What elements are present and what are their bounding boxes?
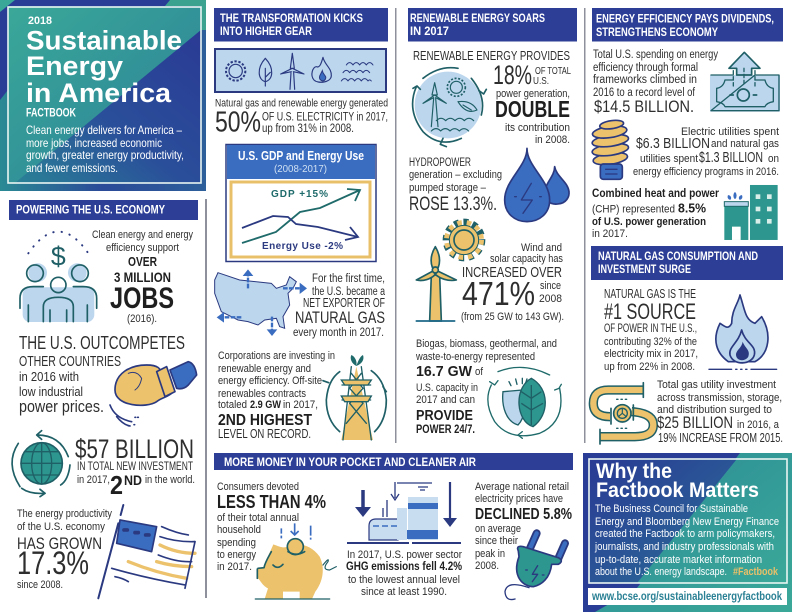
text: 14.5 billion xyxy=(593,49,718,116)
text: 14.5 billion: frameworks climbed in xyxy=(593,74,697,86)
text: 50 percent of electricity: 50% xyxy=(215,106,261,138)
text: electricity prices: peak in xyxy=(475,548,505,560)
icon: buildings xyxy=(724,185,778,240)
text: outcompetes: THE U.S. OUTCOMPETES xyxy=(19,333,185,353)
icon: sun and wind turbine xyxy=(416,223,481,321)
heading: IN 2017 xyxy=(410,24,449,38)
text: utilities: $1.3 BILLION xyxy=(699,150,763,166)
text: biogas, biomass, geothermal: of xyxy=(475,366,484,378)
text: wind and solar: (from 25 GW to 143 GW). xyxy=(461,311,564,323)
icon: globe xyxy=(12,431,70,497)
text: electricity prices: DECLINED 5.8% xyxy=(475,506,572,523)
text: explanation: about the U.S. energy landscape. xyxy=(595,566,727,578)
icon: people and dollar xyxy=(20,232,97,322)
text: investment: IN TOTAL NEW INVESTMENT xyxy=(77,461,193,473)
text: 14.5 billion: Total U.S. spending on energy xyxy=(593,49,718,61)
icon: power plant with falling emissions xyxy=(347,482,461,543)
text: biogas, biomass, geothermal: 16.7 GW xyxy=(416,363,473,380)
text: 18 percent double: U.S. xyxy=(533,75,549,87)
text: less than 4 percent: spending xyxy=(217,537,256,549)
text: gas utility investment: $25 BILLION xyxy=(657,413,733,432)
intro text: Clean energy delivers for America – xyxy=(26,123,182,137)
text: combined heat and power: of U.S. power generation xyxy=(592,216,706,228)
text: investment: ND xyxy=(124,472,142,488)
heading: Why the xyxy=(596,460,672,483)
text: 18 percent double: in 2008. xyxy=(535,134,570,146)
text: natural gas exporter: NET EXPORTER OF xyxy=(303,296,385,310)
icon: money with up arrow xyxy=(710,52,780,112)
text: outcompetes: in 2016 with xyxy=(19,369,79,384)
text: combined heat and power xyxy=(592,186,719,240)
text: productivity: of the U.S. economy xyxy=(17,521,105,533)
text: outcompetes: low industrial xyxy=(19,384,83,399)
text: corporations: energy efficiency. Off-site xyxy=(218,375,322,387)
text: 14.5 billion: efficiency through formal xyxy=(593,62,698,74)
text: wind and solar: 471% xyxy=(462,275,535,312)
text: electricity prices: electricity prices have xyxy=(475,493,563,505)
subtitle: FACTBOOK xyxy=(26,106,76,120)
text: biogas, biomass, geothermal: Biogas, biomass, geothermal, and xyxy=(416,338,557,350)
panel: title banner xyxy=(0,0,206,191)
text: number one source: OF POWER IN THE U.S., xyxy=(604,323,697,335)
heading xyxy=(592,8,783,42)
icon: transmission tower xyxy=(323,355,386,440)
text: investment: $57 BILLION xyxy=(75,434,194,464)
text: number one source: contributing 32% of the xyxy=(604,336,697,348)
intro text: more jobs, increased economic xyxy=(26,136,162,150)
text: 50 percent of electricity xyxy=(215,98,388,138)
text: electricity prices: on average xyxy=(475,523,521,535)
text: less than 4 percent: in 2017. xyxy=(217,561,252,573)
text: 18 percent double: OF TOTAL xyxy=(535,65,571,77)
text: less than 4 percent: household xyxy=(217,524,261,536)
panel: renewable energy soars in 2017 xyxy=(408,8,577,438)
chart: U.S. GDP and energy use xyxy=(226,144,376,262)
intro text: growth, greater energy productivity, xyxy=(26,148,184,162)
text: less than 4 percent: Consumers devoted xyxy=(217,481,299,493)
text: 18 percent double: power generation, xyxy=(496,88,570,100)
text: electricity prices: 2008. xyxy=(475,560,499,572)
text: productivity: 17.3% xyxy=(17,545,89,581)
text: outcompetes: power prices. xyxy=(19,397,104,416)
text: outcompetes: OTHER COUNTRIES xyxy=(19,354,121,370)
text: electricity prices xyxy=(475,481,572,572)
text: hydropower xyxy=(409,157,502,215)
text: productivity: HAS GROWN xyxy=(17,534,102,553)
heading xyxy=(214,8,388,42)
title year: 2018 xyxy=(28,15,52,27)
icon: water drops xyxy=(505,148,569,222)
icon: people and dollar: $ xyxy=(51,242,66,272)
panel: energy efficiency pays dividends xyxy=(591,8,783,240)
heading xyxy=(214,453,573,470)
text: jobs: efficiency support xyxy=(106,242,179,254)
column dividers xyxy=(205,8,586,598)
text: less than 4 percent: to energy xyxy=(217,549,256,561)
title: in America xyxy=(26,78,172,108)
text: natural gas exporter: For the first time, xyxy=(312,273,385,285)
text: 50 percent of electricity: Natural gas and renewable energy generated xyxy=(215,98,388,110)
text: 18 percent double: RENEWABLE ENERGY PROVIDES xyxy=(413,48,570,63)
text: wind and solar: since xyxy=(540,280,561,292)
text: utilities: and natural gas xyxy=(711,138,779,150)
text: productivity xyxy=(17,508,112,591)
text: investment: 2 xyxy=(110,470,123,500)
text: less than 4 percent: LESS THAN 4% xyxy=(217,491,326,512)
text: corporations: LEVEL ON RECORD. xyxy=(218,427,311,441)
text: number one source: electricity mix in 2017, xyxy=(604,348,698,360)
text: utilities: Electric utilities spent xyxy=(681,126,779,138)
text: hydropower: ROSE 13.3%. xyxy=(409,194,497,215)
text: combined heat and power: (CHP) represented xyxy=(592,204,675,216)
text: explanation: up-to-date, accurate market information xyxy=(595,554,762,566)
text: wind and solar: Wind and xyxy=(521,242,562,254)
icon: piggy bank xyxy=(255,523,336,599)
text: utilities: $6.3 BILLION xyxy=(636,136,710,152)
text: outcompetes xyxy=(19,333,185,416)
chart: U.S. GDP and energy use: Energy Use -2% xyxy=(262,241,343,252)
heading: INVESTMENT SURGE xyxy=(598,262,691,276)
text: 18 percent double: its contribution xyxy=(505,122,570,134)
text: 14.5 billion: $14.5 BILLION. xyxy=(594,97,694,116)
text: investment: in the world. xyxy=(145,474,195,486)
text: productivity: The energy productivity xyxy=(17,508,112,520)
text: productivity: since 2008. xyxy=(17,579,63,591)
heading: POWERING THE U.S. ECONOMY xyxy=(16,203,165,217)
text: biogas, biomass, geothermal: 2017 and can xyxy=(416,394,475,406)
icon strip: energy sources xyxy=(215,49,386,92)
heading xyxy=(591,246,783,280)
icon: leaves cycle xyxy=(488,367,561,438)
chart: U.S. GDP and energy use: U.S. GDP and Energy Use xyxy=(238,148,364,163)
intro text: and fewer emissions. xyxy=(26,161,118,175)
title: Energy xyxy=(26,51,123,81)
text: number one source: up from 22% in 2008. xyxy=(604,361,695,373)
text: hydropower: HYDROPOWER xyxy=(409,157,471,169)
text: 14.5 billion: 2016 to a record level of xyxy=(593,87,696,99)
icon: light bulb xyxy=(591,119,629,179)
text: corporations: in 2017, xyxy=(283,399,318,411)
text: jobs: Clean energy and energy xyxy=(92,229,193,241)
title xyxy=(26,26,182,108)
text: 18 percent double: DOUBLE xyxy=(495,96,570,122)
panel: more money in your pocket and cleaner air xyxy=(214,453,573,600)
text: GHG emissions: since at least 1990. xyxy=(361,586,447,598)
heading xyxy=(9,200,198,220)
chart: U.S. GDP and energy use: GDP +15% xyxy=(271,189,328,200)
panel: powering the U.S. economy xyxy=(9,200,198,598)
text: explanation: The Business Council for Sustainable xyxy=(595,503,748,515)
text: 50 percent of electricity: up from 31% in 2008. xyxy=(262,123,354,135)
text: natural gas exporter: every month in 2017. xyxy=(293,327,384,339)
heading: MORE MONEY IN YOUR POCKET AND CLEANER AIR xyxy=(224,455,476,469)
panel: the transformation kicks into higher gear xyxy=(214,8,388,441)
text: combined heat and power: 8.5% xyxy=(678,201,706,216)
text: GHG emissions xyxy=(346,549,462,598)
chart: U.S. GDP and energy use: (2008-2017) xyxy=(274,163,327,175)
text: jobs: (2016). xyxy=(127,313,157,325)
text: less than 4 percent: of their total annual xyxy=(217,512,299,524)
heading: STRENGTHENS ECONOMY xyxy=(596,25,718,39)
text: electricity prices: since their xyxy=(475,535,518,547)
text: jobs: 3 MILLION xyxy=(114,269,171,285)
icon: renewable cycle xyxy=(413,68,486,147)
text: gas utility investment: and distribution surged to xyxy=(657,404,772,416)
text: corporations: totaled xyxy=(218,399,247,411)
text: number one source: NATURAL GAS IS THE xyxy=(604,287,696,301)
text: investment: in 2017, xyxy=(77,474,110,486)
text: 18 percent double xyxy=(413,48,571,146)
text: gas utility investment: in 2016, a xyxy=(737,419,780,431)
text: 50 percent of electricity: OF U.S. ELECTRICITY in 2017, xyxy=(262,112,388,124)
panel: why the factbook matters xyxy=(583,453,792,612)
text: GHG emissions: to the lowest annual level xyxy=(348,574,460,586)
text: gas utility investment: Total gas utility investment xyxy=(657,379,776,391)
heading: THE TRANSFORMATION KICKS xyxy=(220,11,363,25)
text: 18 percent double: 18% xyxy=(493,60,532,90)
panel: natural gas consumption and investment surge xyxy=(591,246,783,445)
text: jobs xyxy=(92,229,193,325)
heading: Factbook Matters xyxy=(596,479,759,502)
text: electricity prices: Average national retail xyxy=(475,481,569,493)
icon: flame xyxy=(709,295,777,369)
icon: U.S. map with export arrows xyxy=(215,269,307,336)
text: natural gas exporter: the U.S. became a xyxy=(312,286,385,298)
text: wind and solar: 2008 xyxy=(539,293,562,305)
heading xyxy=(596,460,759,502)
text: wind and solar xyxy=(461,242,564,323)
text: combined heat and power: in 2017. xyxy=(592,228,628,240)
text: GHG emissions: GHG emissions fell 4.2% xyxy=(346,559,462,573)
text: utilities: utilities spent xyxy=(640,153,698,165)
text: biogas, biomass, geothermal: waste-to-energy represented xyxy=(415,351,535,363)
text: natural gas exporter: NATURAL GAS xyxy=(295,308,385,327)
icon: electric plug xyxy=(505,533,565,600)
text: biogas, biomass, geothermal: PROVIDE xyxy=(416,407,473,424)
text: corporations: Corporations are investing in xyxy=(218,350,335,362)
text: hydropower: pumped storage – xyxy=(409,182,487,194)
text: corporations: renewables contracts xyxy=(218,388,306,400)
text: corporations xyxy=(218,350,335,441)
text: corporations: 2ND HIGHEST xyxy=(218,412,312,429)
icon: gas pipes with valve xyxy=(593,383,653,444)
text: wind and solar: INCREASED OVER xyxy=(462,264,562,281)
text: explanation xyxy=(594,503,779,578)
text: number one source xyxy=(604,287,698,373)
text: gas utility investment xyxy=(657,379,783,445)
heading: INTO HIGHER GEAR xyxy=(220,24,312,38)
icon: flag xyxy=(98,505,195,598)
text: explanation: #Factbook xyxy=(733,566,779,578)
text: jobs: JOBS xyxy=(110,282,174,315)
text: corporations: renewable energy and xyxy=(218,363,311,375)
text: biogas, biomass, geothermal xyxy=(415,338,557,436)
icon: boxing glove xyxy=(110,362,197,426)
heading xyxy=(408,8,577,42)
heading: RENEWABLE ENERGY SOARS xyxy=(410,11,545,25)
text: wind and solar: solar capacity has xyxy=(490,253,563,265)
text: hydropower: generation – excluding xyxy=(409,169,502,181)
text: utilities xyxy=(633,126,779,178)
text: number one source: #1 SOURCE xyxy=(604,299,696,324)
text: biogas, biomass, geothermal: U.S. capacity in xyxy=(416,382,478,394)
text: biogas, biomass, geothermal: POWER 24/7. xyxy=(416,422,475,436)
text: GHG emissions: In 2017, U.S. power sector xyxy=(347,549,462,561)
text: natural gas exporter xyxy=(293,273,385,339)
text: investment xyxy=(75,434,195,500)
text: corporations: 2.9 GW xyxy=(250,399,282,411)
text: utilities: on xyxy=(768,153,779,165)
text: jobs: OVER xyxy=(128,254,157,269)
text: combined heat and power: Combined heat and power xyxy=(592,186,719,200)
intro text xyxy=(26,123,184,175)
title: Sustainable xyxy=(26,26,182,56)
text: less than 4 percent xyxy=(217,481,326,573)
